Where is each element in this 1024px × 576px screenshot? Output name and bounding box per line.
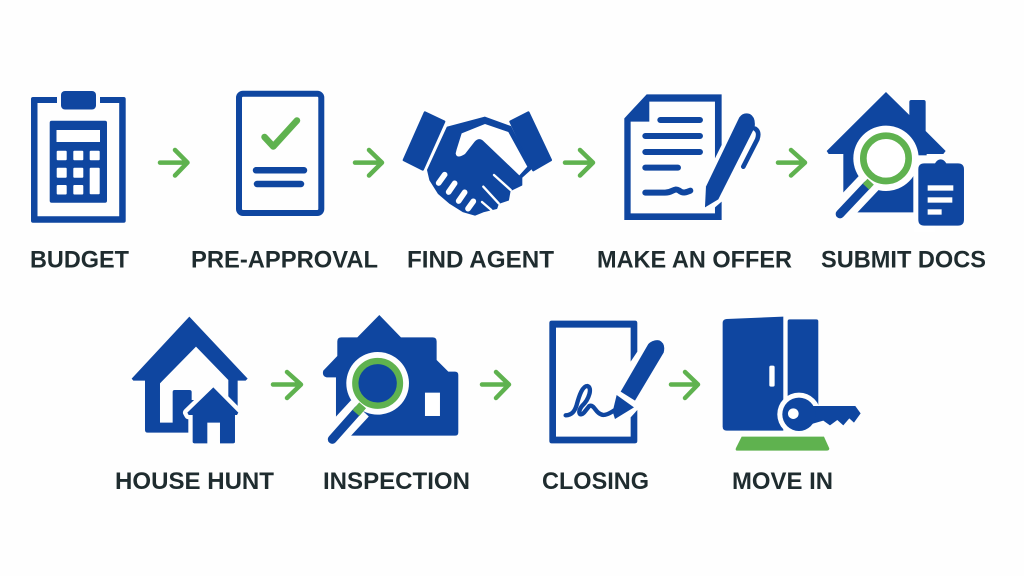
arrow: closing to move in (671, 372, 698, 398)
icon: signed document and pen (549, 321, 664, 443)
arrow: find agent to make an offer (565, 150, 593, 176)
icon: handshake (404, 113, 551, 215)
label: closing: CLOSING (542, 468, 649, 495)
label: house hunt: HOUSE HUNT (115, 468, 274, 495)
arrow: house hunt to inspection (273, 372, 301, 398)
label: inspection: INSPECTION (323, 468, 470, 495)
arrow: inspection to closing (482, 372, 509, 398)
step: submit docs (821, 92, 986, 273)
step: pre-approval (191, 94, 378, 273)
label: submit docs: SUBMIT DOCS (821, 246, 986, 273)
step: make an offer (597, 94, 792, 273)
label: make an offer: MAKE AN OFFER (597, 246, 792, 273)
step: find agent (404, 113, 554, 273)
icon: approved document (239, 94, 321, 213)
step: house hunt (115, 317, 274, 495)
icon: house, magnifier and clipboard (827, 92, 964, 232)
arrow: make an offer to submit docs (778, 150, 805, 176)
icon: clipboard with calculator (31, 91, 126, 223)
label: move in: MOVE IN (732, 468, 833, 495)
arrow: budget to pre-approval (160, 150, 188, 176)
icon: contract and pen (624, 94, 758, 220)
label: pre-approval: PRE-APPROVAL (191, 246, 378, 273)
arrow: pre-approval to find agent (355, 150, 382, 176)
icon: door, key and mat (723, 317, 861, 451)
label: budget: BUDGET (30, 246, 129, 273)
icon: house under magnifier (320, 315, 458, 452)
step: move in (723, 317, 861, 495)
label: find agent: FIND AGENT (407, 246, 554, 273)
step: inspection (320, 315, 470, 495)
step: closing (542, 321, 664, 495)
icon: houses (132, 317, 248, 443)
step: budget (30, 91, 129, 273)
